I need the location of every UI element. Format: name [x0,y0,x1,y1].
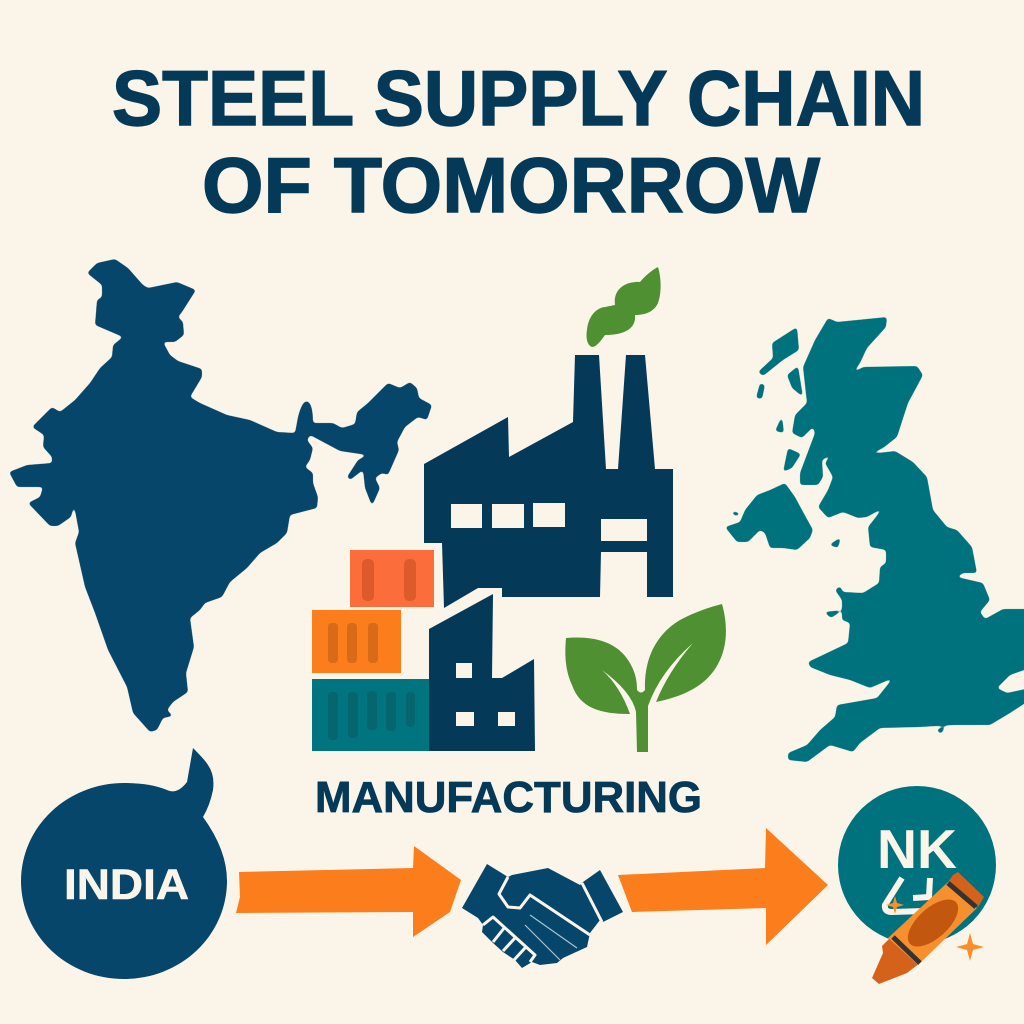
Isle of Man, Anglesey, Wight [824,537,946,734]
title: STEEL SUPPLY CHAIN [112,54,925,142]
map: India [9,259,432,732]
icon: green smoke [587,267,661,347]
title [112,54,925,229]
container: red [350,550,434,607]
container: teal [312,679,429,751]
badge: UK [838,786,996,944]
container: orange [312,610,401,673]
icon: sparkle small [886,896,904,914]
containers [312,550,434,751]
arrow: handshake to UK [618,828,828,945]
Great Britain [788,317,1024,762]
icon: sparkle large [956,933,984,961]
icon: green sprout [565,604,726,752]
speech bubble [21,748,227,979]
icon: small factory [429,594,535,751]
map: United Kingdom [725,317,1024,762]
title: OF TOMORROW [202,141,820,229]
label: manufacturing: MANUFACTURING [315,773,702,822]
Scottish islands [756,327,803,472]
icon: handshake [462,864,623,968]
palm highlights [525,915,577,960]
teal circle [838,786,996,944]
India label: INDIA [64,861,189,909]
icon: crayon [872,872,984,984]
badge glyph [885,878,930,912]
badge: India [21,748,227,979]
Northern Ireland [725,483,813,550]
badge letters: NK [877,818,957,880]
icon: large factory [424,355,673,608]
thumb and cuff outlines [483,877,602,962]
hands silhouette [462,864,623,968]
arrow: India to handshake [236,846,461,937]
